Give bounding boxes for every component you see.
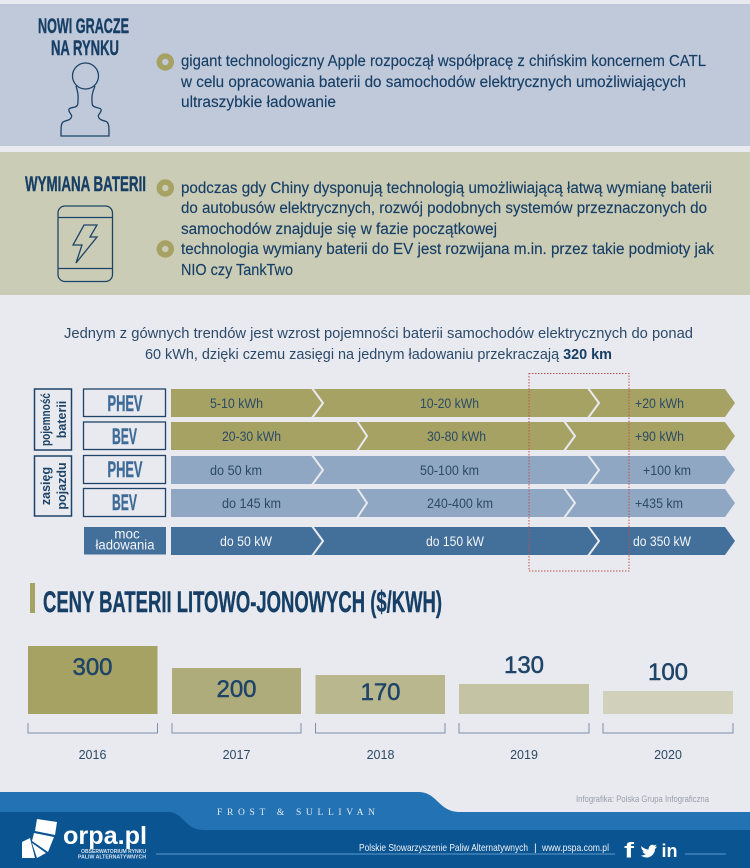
row: charging power: do 50 kW bbox=[220, 534, 272, 549]
bar 2020: 100 bbox=[648, 659, 688, 686]
row: PHEV range: 50-100 km bbox=[420, 463, 479, 478]
social icons: f bbox=[624, 840, 635, 862]
bar 2018 bbox=[316, 675, 445, 762]
row: PHEV capacity: 5-10 kWh bbox=[210, 396, 263, 411]
label: PHEV range: PHEV bbox=[108, 457, 143, 482]
label: zasięg pojazdu: zasięg bbox=[39, 467, 53, 505]
text block: gigant technologiczny Apple rozpoczął współpracę z chińskim koncernem CATL bbox=[181, 53, 706, 70]
row: charging power: do 350 kW bbox=[633, 534, 691, 549]
icon: chess pawn bbox=[61, 63, 109, 136]
row: BEV range: +435 km bbox=[635, 496, 683, 511]
bar 2016 bbox=[28, 646, 158, 762]
logo: orpa.pl bbox=[22, 819, 147, 860]
bar 2020: 2020 bbox=[654, 748, 682, 762]
bar 2017: 2017 bbox=[223, 748, 250, 762]
logo: orpa.pl: OBSERWATORIUM RYNKU bbox=[81, 849, 146, 855]
intro text bbox=[64, 325, 693, 363]
heading: nowi gracze: NA RYNKU bbox=[51, 37, 119, 60]
logo: orpa.pl: PALIW ALTERNATYWNYCH bbox=[78, 854, 146, 860]
row: BEV capacity: +90 kWh bbox=[635, 429, 684, 444]
bar 2019: 2019 bbox=[510, 748, 538, 762]
label: pojemność baterii: pojemność bbox=[39, 393, 53, 446]
row: PHEV capacity bbox=[171, 388, 735, 418]
organisation line: Polskie Stowarzyszenie Paliw Alternatywnych bbox=[359, 842, 528, 854]
bullets bbox=[159, 182, 171, 255]
bar 2020 bbox=[603, 659, 733, 762]
row: BEV capacity: 30-80 kWh bbox=[427, 429, 486, 444]
text block: do autobusów elektrycznych, rozwój podobnych systemów przeznaczonych do bbox=[181, 200, 707, 217]
row: PHEV range: do 50 km bbox=[210, 463, 262, 478]
timeline chart bbox=[34, 374, 735, 571]
row: BEV capacity bbox=[171, 421, 735, 451]
row: BEV range: 240-400 km bbox=[427, 496, 493, 511]
label: PHEV range bbox=[84, 456, 166, 484]
text block: technologia wymiany baterii do EV jest rozwijana m.in. przez takie podmioty jak bbox=[181, 241, 714, 258]
row: PHEV capacity: +20 kWh bbox=[635, 396, 684, 411]
label: pojemność baterii: baterii bbox=[55, 401, 69, 438]
row: PHEV range bbox=[171, 455, 735, 485]
row: BEV range: do 145 km bbox=[222, 496, 281, 511]
row: BEV range bbox=[171, 488, 735, 518]
bar 2019: 130 bbox=[504, 652, 544, 679]
text block: podczas gdy Chiny dysponują technologią umożliwiającą łatwą wymianę baterii bbox=[181, 180, 712, 197]
row: BEV capacity: 20-30 kWh bbox=[222, 429, 281, 444]
label: moc ładowania: ładowania bbox=[96, 538, 155, 552]
bar 2017: 200 bbox=[216, 676, 257, 703]
heading: nowi gracze bbox=[38, 15, 129, 60]
heading: nowi gracze: NOWI GRACZE bbox=[38, 15, 129, 38]
text block: NIO czy TankTwo bbox=[181, 262, 293, 279]
highlight: dotted frame bbox=[529, 374, 629, 571]
heading: wymiana baterii: WYMIANA BATERII bbox=[25, 173, 146, 196]
heading: ceny baterii bbox=[30, 583, 442, 619]
row: PHEV range: +100 km bbox=[643, 463, 691, 478]
credit: Infografika: Polska Grupa Infograficzna bbox=[576, 794, 710, 805]
intro text: Jednym z gównych trendów jest wzrost pojemności baterii samochodów elektrycznych do ponad bbox=[64, 325, 693, 342]
label: moc ładowania bbox=[84, 526, 166, 554]
bullet bbox=[159, 56, 171, 68]
text block: samochodów znajduje się w fazie początkowej bbox=[181, 221, 497, 238]
bar 2017 bbox=[172, 668, 301, 762]
panel: nowi gracze na rynku bbox=[0, 4, 750, 146]
label: BEV battery bbox=[84, 422, 166, 450]
footer bbox=[0, 792, 750, 868]
text block: w celu opracowania baterii do samochodów elektrycznych umożliwiających bbox=[180, 74, 686, 91]
label: pojemność baterii bbox=[34, 389, 72, 450]
bar 2016: 300 bbox=[72, 654, 113, 681]
icon: phone with lightning bbox=[58, 206, 112, 282]
label: BEV battery: BEV bbox=[112, 424, 137, 449]
label: zasięg pojazdu bbox=[34, 456, 72, 516]
row: PHEV capacity: 10-20 kWh bbox=[420, 396, 479, 411]
label: BEV range bbox=[84, 488, 166, 516]
intro text: 60 kWh, dzięki czemu zasięgi na jednym ładowaniu przekraczają 320 km bbox=[145, 346, 612, 363]
logo: orpa.pl: orpa.pl bbox=[63, 822, 147, 850]
social icons: in bbox=[662, 841, 678, 861]
label: BEV range: BEV bbox=[112, 490, 137, 515]
label: zasięg pojazdu: pojazdu bbox=[55, 462, 69, 510]
row: charging power bbox=[171, 526, 735, 556]
panel: wymiana baterii bbox=[0, 152, 750, 295]
bar 2016: 2016 bbox=[79, 748, 106, 762]
text block: ultraszybkie ładowanie bbox=[181, 94, 336, 111]
text block bbox=[181, 180, 714, 279]
bar 2019 bbox=[459, 652, 589, 762]
bar chart: battery prices bbox=[28, 646, 733, 762]
organisation line: www.pspa.com.pl bbox=[541, 842, 609, 854]
row: charging power: do 150 kW bbox=[426, 534, 484, 549]
heading: ceny baterii: CENY BATERII LITOWO-JONOWYCH ($/KWH) bbox=[43, 586, 442, 619]
label: PHEV battery: PHEV bbox=[108, 391, 143, 416]
label: moc ładowania: moc bbox=[114, 526, 140, 542]
bar 2018: 2018 bbox=[367, 748, 394, 762]
text block bbox=[180, 53, 706, 111]
organisation line: | bbox=[534, 842, 537, 854]
bar 2018: 170 bbox=[360, 679, 401, 706]
social icons bbox=[624, 840, 678, 862]
source: frost and sullivan: FROST & SULLIVAN bbox=[217, 808, 375, 818]
label: PHEV battery bbox=[84, 389, 166, 416]
